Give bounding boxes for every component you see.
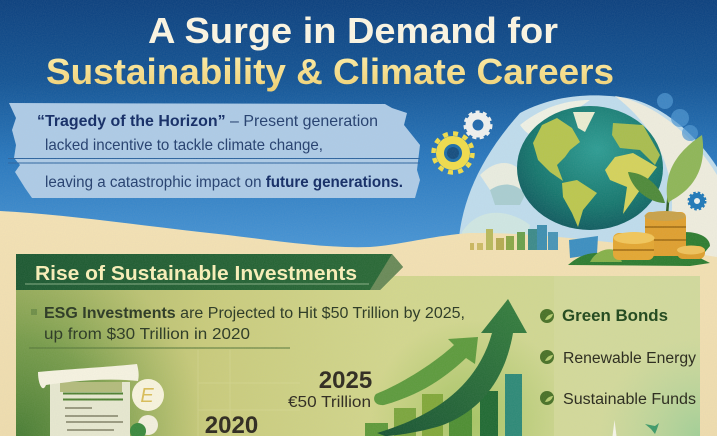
- north america: [533, 118, 580, 181]
- label: 2025: €50 Trillion: [288, 394, 371, 411]
- small coin: [677, 246, 705, 259]
- bar chart: [365, 374, 522, 436]
- arrow: light green: [374, 337, 478, 405]
- ESG line two: up from $30 Trillion in 2020: [44, 326, 250, 343]
- E badge: [132, 379, 164, 411]
- label: 2025: 2025: [319, 367, 372, 394]
- panel: rise of sustainable investments: [16, 276, 700, 436]
- icon: small blue gear: [688, 192, 706, 210]
- list: investment types: [540, 307, 696, 408]
- icon: seedling on coins: [568, 135, 710, 266]
- africa: [605, 153, 657, 214]
- callout line two: lacked incentive to tackle climate change,: [45, 137, 323, 154]
- front coins: [613, 233, 654, 260]
- panel heading ribbon: [16, 254, 403, 290]
- bullet: [31, 309, 37, 315]
- icon: white gear: [465, 112, 491, 138]
- right side column tint: [554, 276, 700, 436]
- ESG text block: [29, 305, 465, 348]
- small badge: [138, 415, 158, 435]
- renewable energy: Renewable Energy: [563, 350, 696, 367]
- icon: document scroll: [38, 364, 164, 436]
- title: A Surge in Demand for: [148, 10, 558, 51]
- title: Sustainability & Climate Careers: [46, 51, 614, 92]
- leaf mound: [568, 232, 710, 266]
- blue splashes top right: [657, 93, 698, 141]
- icon: globe: [517, 106, 663, 230]
- icon: document scroll: E: [140, 385, 154, 407]
- splash leaf: [645, 423, 659, 434]
- icon: yellow gear: [434, 134, 472, 172]
- wind turbine: [612, 420, 616, 436]
- brush band: [9, 103, 420, 198]
- bottom right tint: [554, 316, 700, 436]
- halo behind globe: [458, 95, 717, 262]
- arrow: dark green: [377, 299, 527, 436]
- greenland: [573, 112, 595, 132]
- green bonds: Green Bonds: [562, 307, 668, 325]
- stem: [667, 180, 672, 214]
- ESG line one: ESG Investments are Projected to Hit $50 Trillion by 2025,: [44, 305, 465, 322]
- heading text: Rise of Sustainable Investments: [35, 263, 357, 285]
- sky background: [0, 0, 717, 262]
- callout line one: “Tragedy of the Horizon” – Present generation: [37, 113, 378, 130]
- callout line three: leaving a catastrophic impact on future generations.: [45, 174, 403, 191]
- sand hill: [0, 211, 717, 436]
- sustainable funds: Sustainable Funds: [563, 391, 696, 408]
- stack of coins: [645, 212, 686, 256]
- label: 2025: [288, 367, 372, 411]
- faint grid: [198, 350, 300, 436]
- mini bar chart by globe: [470, 225, 598, 258]
- title: [46, 10, 614, 92]
- south america: [562, 180, 597, 227]
- small leaf: [628, 172, 665, 203]
- eurasia: [612, 123, 660, 165]
- callout: tragedy of the horizon: [8, 103, 420, 198]
- large leaf: [667, 135, 703, 203]
